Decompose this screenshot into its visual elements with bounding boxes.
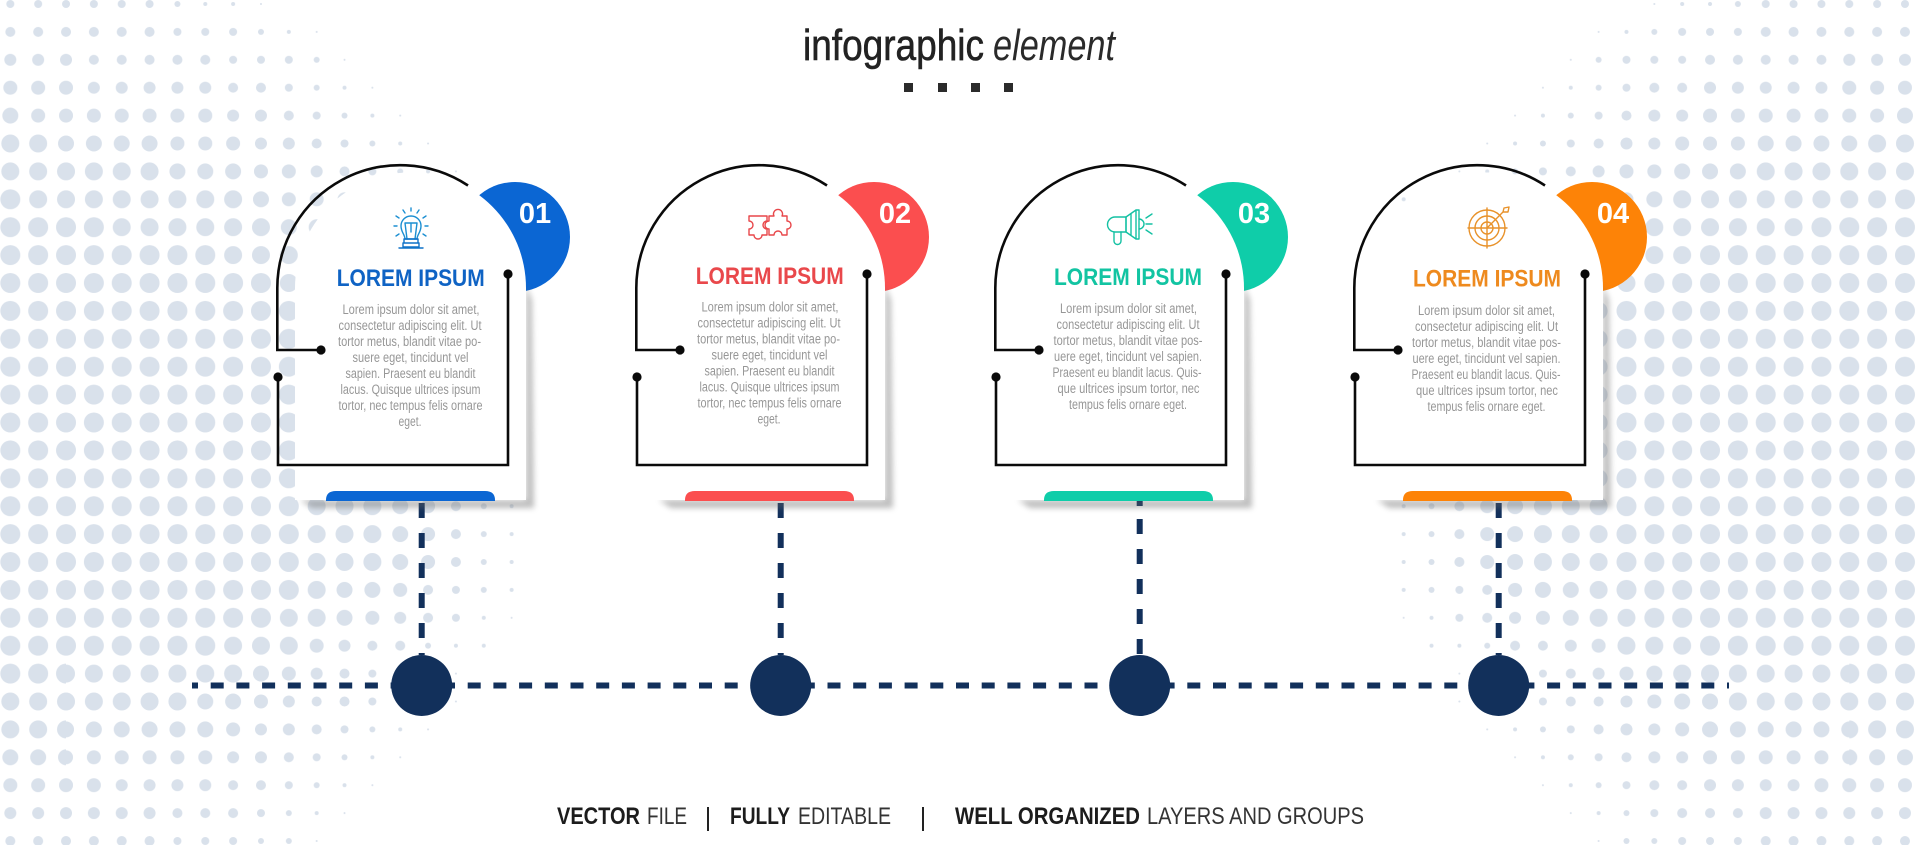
body text: tortor metus, blandit vitae pos-: [1412, 335, 1561, 350]
body text: consectetur adipiscing elit. Ut: [338, 318, 482, 333]
body text: consectetur adipiscing elit. Ut: [1056, 317, 1200, 332]
connector 1: [419, 503, 425, 655]
body text: suere eget, tincidunt vel: [352, 350, 468, 365]
heading: LOREM IPSUM: [696, 263, 844, 290]
body text: lacus. Quisque ultrices ipsum: [700, 380, 840, 394]
connector 3: [1137, 500, 1143, 655]
body text: Lorem ipsum dolor sit amet,: [702, 300, 838, 314]
title squares: [904, 83, 1013, 92]
number 03: 03: [1238, 198, 1270, 230]
body text: Praesent eu blandit lacus. Quis-: [1052, 365, 1202, 380]
body text: tempus felis ornare eget.: [1069, 397, 1187, 412]
body text: consectetur adipiscing elit. Ut: [1415, 319, 1558, 334]
timeline node 1: [391, 655, 452, 716]
heading: LOREM IPSUM: [1413, 266, 1561, 292]
footer text: WELL ORGANIZED: [955, 803, 1140, 830]
panel: card 1: [273, 165, 570, 508]
background halftone: left: [0, 0, 525, 845]
body text: [1412, 303, 1561, 414]
body text: eget.: [758, 412, 780, 426]
body text: lacus. Quisque ultrices ipsum: [340, 382, 480, 397]
timeline node 2: [750, 655, 811, 716]
body text: tortor metus, blandit vitae pos-: [1054, 333, 1202, 348]
body text: sapien. Praesent eu blandit: [704, 364, 835, 378]
body text: Lorem ipsum dolor sit amet,: [1060, 301, 1197, 316]
title: [803, 21, 1116, 70]
body text: consectetur adipiscing elit. Ut: [698, 316, 841, 330]
footer text: [557, 803, 1364, 831]
body text: que ultrices ipsum tortor, nec: [1058, 381, 1200, 396]
background halftone: right: [1390, 0, 1920, 845]
body text: Lorem ipsum dolor sit amet,: [342, 302, 480, 317]
icon: puzzle: [749, 209, 791, 239]
timeline node 4: [1468, 655, 1529, 716]
connector 2: [778, 503, 784, 655]
icon: megaphone: [1108, 210, 1152, 245]
body text: Praesent eu blandit lacus. Quis-: [1412, 367, 1560, 382]
connector 4: [1496, 503, 1502, 655]
panel: card 3: [991, 165, 1288, 508]
title: element: [993, 21, 1116, 70]
icon: target: [1468, 207, 1509, 248]
body text: tortor, nec tempus felis ornare: [698, 396, 842, 410]
timeline: horizontal dashed line: [192, 682, 1729, 688]
number 04: 04: [1597, 198, 1629, 230]
heading: LOREM IPSUM: [1054, 264, 1202, 291]
body text: suere eget, tincidunt vel: [712, 348, 828, 362]
heading: LOREM IPSUM: [337, 265, 485, 292]
footer text: VECTOR: [557, 803, 640, 830]
footer text: FULLY: [730, 803, 790, 830]
panel: card 4: [1350, 165, 1647, 508]
body text: sapien. Praesent eu blandit: [346, 366, 476, 381]
number 02: 02: [879, 198, 911, 230]
body text: eget.: [398, 414, 422, 429]
body text: [1052, 301, 1202, 412]
timeline node 3: [1109, 655, 1170, 716]
body text: uere eget, tincidunt vel sapien.: [1412, 351, 1560, 366]
body text: uere eget, tincidunt vel sapien.: [1054, 349, 1202, 364]
footer text: LAYERS AND GROUPS: [1147, 803, 1364, 830]
footer text: FILE: [647, 803, 687, 830]
body text: tortor, nec tempus felis ornare: [338, 398, 482, 413]
panel: card 2: [632, 165, 929, 508]
body text: que ultrices ipsum tortor, nec: [1416, 383, 1558, 398]
body text: [697, 300, 842, 426]
body text: Lorem ipsum dolor sit amet,: [1418, 303, 1555, 318]
body text: tortor metus, blandit vitae po-: [697, 332, 840, 346]
footer text: EDITABLE: [798, 803, 891, 830]
title: infographic: [803, 21, 984, 70]
body text: tortor metus, blandit vitae po-: [338, 334, 481, 349]
body text: [338, 302, 482, 429]
body text: tempus felis ornare eget.: [1428, 399, 1546, 414]
number 01: 01: [519, 198, 551, 230]
icon: light bulb: [394, 208, 428, 248]
